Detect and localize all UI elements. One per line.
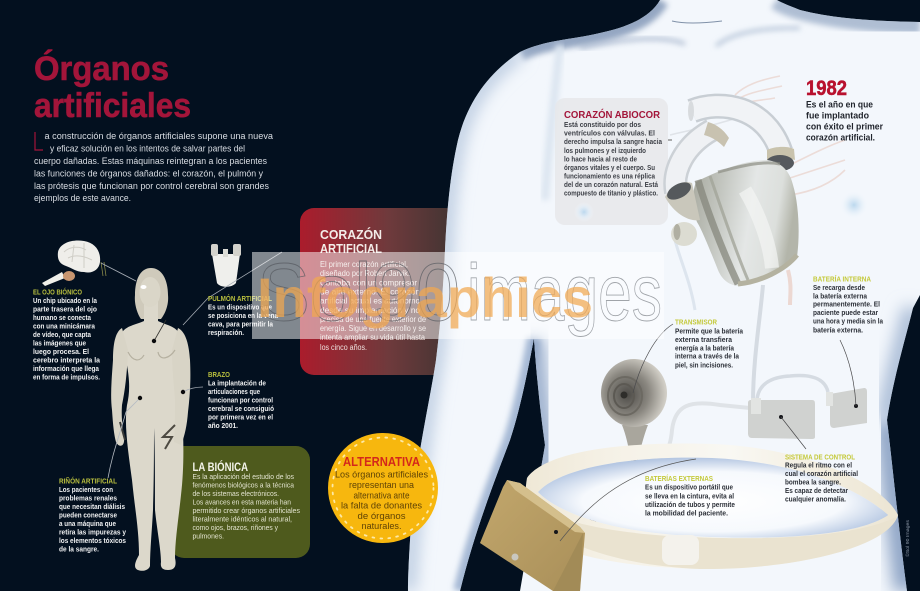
text: pulmón artificial: se posiciona en la vena: [208, 313, 278, 320]
text: brazo: por primera vez en el: [208, 414, 273, 422]
text: sistema de control: cual el corazón artificial: [785, 471, 858, 478]
text: riñón artificial: [59, 476, 126, 554]
watermark: [252, 247, 664, 339]
text: pulmón artificial: PULMÓN ARTIFICIAL: [208, 294, 273, 303]
text: corazón artificial: diseñado por Robert Jarvik.: [320, 269, 410, 278]
figure: female mannequin: [111, 268, 190, 571]
text: corazón artificial: precisa de una fuente exterior de: [320, 315, 426, 324]
mannequin leader lines: [101, 252, 282, 478]
text: baterías externas: Es un dispositivo portátil que: [645, 485, 733, 492]
icon: internal battery: [826, 388, 867, 428]
text: el ojo biónico: parte trasera del ojo: [33, 306, 97, 314]
text: batería interna: una hora y media sin la: [813, 319, 883, 326]
text: sistema de control: [785, 454, 858, 504]
callout: alternativa: representan una: [349, 480, 414, 490]
text: batería interna: permanentemente. El: [813, 302, 880, 309]
text: batería interna: la batería externa: [813, 293, 867, 300]
text: el ojo biónico: con una minicámara: [33, 324, 95, 330]
icon: control system box: [748, 398, 815, 439]
text: riñón artificial: los elementos tóxicos: [59, 538, 126, 545]
icon: artificial heart device: [664, 101, 799, 286]
panel: la biónica: literalmente idénticos al natural,: [192, 516, 292, 524]
statistic: 1982: Es el año en que: [806, 100, 873, 110]
text: baterías externas: BATERÍAS EXTERNAS: [645, 474, 713, 483]
text: sistema de control: Regula el ritmo con el: [785, 463, 852, 470]
text: el ojo biónico: luego procesa. El: [33, 349, 89, 356]
intro text: y eficaz solución en los intentos de salvar partes del: [50, 144, 245, 154]
statistic: 1982: corazón artificial.: [806, 133, 875, 144]
leader lines: [560, 324, 856, 541]
panel: la biónica: de los sistemas electrónicos.: [192, 491, 279, 498]
title: artificiales: [34, 87, 191, 125]
text: corazón artificial: artificial actual es autónomo: [320, 296, 421, 306]
text: el ojo biónico: EL OJO BIÓNICO: [33, 288, 82, 296]
text: baterías externas: la mobilidad del paciente.: [645, 511, 728, 518]
panel: la biónica: Es la aplicación del estudio de los: [192, 474, 294, 481]
icon: artificial lung: [211, 244, 241, 287]
intro text: ejemplos de este avance.: [34, 193, 131, 203]
text: baterías externas: se lleva en la cintura, evita al: [645, 493, 734, 500]
intro text: a construcción de órganos artificiales supone una nueva: [44, 131, 273, 141]
text: transmisor: Permite que la batería: [675, 328, 743, 335]
text: corazón artificial: CORAZÓN: [320, 227, 382, 242]
text: el ojo biónico: de vídeo, que capta: [33, 332, 91, 339]
text: brazo: [208, 372, 274, 430]
text: el ojo biónico: las imágenes que: [33, 340, 86, 348]
human torso illustration: [408, 0, 920, 591]
text: corazón artificial: desde su implantación y no: [320, 306, 421, 315]
callout: alternativa: [328, 433, 438, 543]
panel: corazón abiocor: compuesto de titanio y plástico.: [564, 190, 658, 198]
panel: corazón abiocor: ventrículos con válvulas. El: [564, 130, 655, 138]
icon: transmitter disc: [601, 359, 667, 460]
text: transmisor: energía a la batería: [675, 345, 734, 352]
text: batería interna: paciente puede estar: [813, 310, 878, 317]
icon: battery pouch: [480, 480, 585, 591]
text: riñón artificial: Los pacientes con: [59, 487, 113, 494]
text: riñón artificial: retira las impurezas y: [59, 530, 126, 536]
panel: corazón abiocor: Está constituido por dos: [564, 122, 641, 129]
text: sistema de control: SISTEMA DE CONTROL: [785, 454, 856, 461]
panel: corazón abiocor: CORAZÓN ABIOCOR: [564, 108, 660, 121]
panel: la biónica: como ojos, brazos, riñones y: [192, 525, 278, 532]
text: el ojo biónico: humano se conecta: [33, 315, 91, 322]
text: baterías externas: [645, 474, 735, 518]
text: batería interna: BATERÍA INTERNA: [813, 275, 871, 284]
panel: corazón abiocor: los pulmones y el izquierdo: [564, 148, 646, 155]
panel: la biónica: Los avances en esta materia han: [192, 500, 291, 506]
callout: alternativa: alternativa ante: [354, 490, 410, 500]
text: brazo: cerebral se consiguió: [208, 406, 274, 413]
text: batería interna: batería externa.: [813, 327, 863, 334]
watermark: Sol90: [257, 247, 460, 338]
statistic: 1982: 1982: [806, 77, 847, 100]
text: riñón artificial: de la sangre.: [59, 546, 99, 554]
panel: corazón abiocor: [555, 98, 668, 225]
text: transmisor: interna a través de la: [675, 354, 739, 361]
statistic: 1982: fue implantado: [806, 110, 869, 122]
text: batería interna: [813, 275, 883, 334]
text: riñón artificial: problemas renales: [59, 496, 117, 502]
icon: bionic eye brain: [42, 240, 106, 286]
text: pulmón artificial: Es un dispositivo que: [208, 304, 272, 312]
text: corazón artificial: El primer corazón artificial,: [320, 260, 408, 269]
panel: corazón artificial box: [300, 208, 460, 375]
text: riñón artificial: pueden conectarse: [59, 512, 117, 520]
statistic: 1982: [806, 77, 883, 144]
text: transmisor: [675, 319, 743, 369]
text: batería interna: Se recarga desde: [813, 285, 865, 292]
text: transmisor: externa transfiera: [675, 337, 732, 344]
callout: alternativa: naturales.: [362, 521, 402, 531]
title: Órganos: [34, 50, 169, 88]
icon: eye chip: [140, 285, 146, 289]
text: riñón artificial: que necesitan diálisis: [59, 504, 125, 511]
panel: la biónica: fenómenos biológicos a la técnica: [192, 482, 294, 490]
title: [34, 50, 191, 125]
text: transmisor: TRANSMISOR: [675, 319, 717, 326]
panel: la biónica: pulmones.: [192, 534, 224, 540]
text: corazón artificial: los cinco años.: [320, 343, 367, 352]
panel: la biónica: permitido crear órganos artificiales: [192, 508, 300, 515]
intro text: las prótesis que funcionan por control cerebral son grandes: [34, 181, 269, 191]
intro text: las funciones de órganos dañados: el corazón, el pulmón y: [34, 168, 263, 178]
panel: corazón abiocor: derecho impulsa la sangre hacia: [564, 139, 662, 146]
text: baterías externas: utilización de tubos y permite: [645, 502, 735, 509]
text: transmisor: piel, sin incisiones.: [675, 362, 733, 369]
callout: alternativa: Los órganos artificiales: [335, 470, 428, 480]
panel: la biónica: [170, 446, 310, 558]
nipple glow: [840, 191, 868, 219]
panel: corazón abiocor: funcionamiento es una réplica: [564, 174, 655, 180]
text: pulmón artificial: cava, para permitir la: [208, 322, 273, 328]
text: sistema de control: cualquier anomalía.: [785, 497, 846, 504]
text: el ojo biónico: información que llega: [33, 366, 99, 373]
text: brazo: año 2001.: [208, 423, 238, 430]
intro text: [34, 131, 273, 203]
text: pulmón artificial: respiración.: [208, 330, 244, 337]
text: corazón artificial: intenta ampliar su vida útil hasta: [320, 333, 425, 342]
intro text: cuerpo dañadas. Estas máquinas reintegran a los pacientes: [34, 156, 267, 166]
text: sistema de control: Es capaz de detectar: [785, 488, 848, 495]
text: el ojo biónico: en forma de impulsos.: [33, 374, 100, 382]
text: corazón artificial: de aire externo. El corazón: [320, 288, 420, 296]
text: brazo: articulaciones que: [208, 389, 260, 396]
credit: ©Sol 90 Images: [904, 519, 911, 557]
text: brazo: funcionan por control: [208, 398, 273, 404]
text: el ojo biónico: Un chip ubicado en la: [33, 298, 97, 305]
watermark: images: [467, 248, 662, 337]
text: brazo: BRAZO: [208, 372, 230, 379]
panel: la biónica: LA BIÓNICA: [192, 461, 248, 474]
text: el ojo biónico: [33, 288, 100, 382]
callout: alternativa: la falta de donantes: [341, 500, 423, 510]
text: el ojo biónico: cerebro interpreta la: [33, 358, 100, 364]
icon: belt: [526, 444, 898, 569]
panel: corazón abiocor: del de un corazón natural. Está: [564, 182, 658, 189]
text: riñón artificial: RIÑÓN ARTIFICIAL: [59, 476, 118, 486]
callout: alternativa: de órganos: [358, 511, 406, 521]
watermark: Infographics: [257, 266, 593, 329]
text: riñón artificial: a una máquina que: [59, 521, 116, 528]
text: sistema de control: bombea la sangre.: [785, 480, 841, 487]
text: corazón artificial: energía. Sigue en desarrollo y se: [320, 324, 426, 333]
statistic: 1982: con éxito el primer: [806, 122, 883, 132]
tubes and cables: [583, 285, 828, 532]
panel: corazón abiocor: órganos vitales y el cuerpo. Su: [564, 165, 655, 172]
vessels behind heart: [668, 76, 845, 310]
text: brazo: La implantación de: [208, 380, 266, 388]
text: corazón artificial: Contaba con un compresor: [320, 278, 417, 287]
callout: alternativa: ALTERNATIVA: [343, 455, 420, 469]
text: corazón artificial: ARTIFICIAL: [320, 241, 382, 256]
panel: corazón abiocor: lo hace hacia al resto de: [564, 156, 637, 164]
text: corazón artificial: [320, 227, 426, 352]
text: pulmón artificial: [208, 294, 278, 337]
